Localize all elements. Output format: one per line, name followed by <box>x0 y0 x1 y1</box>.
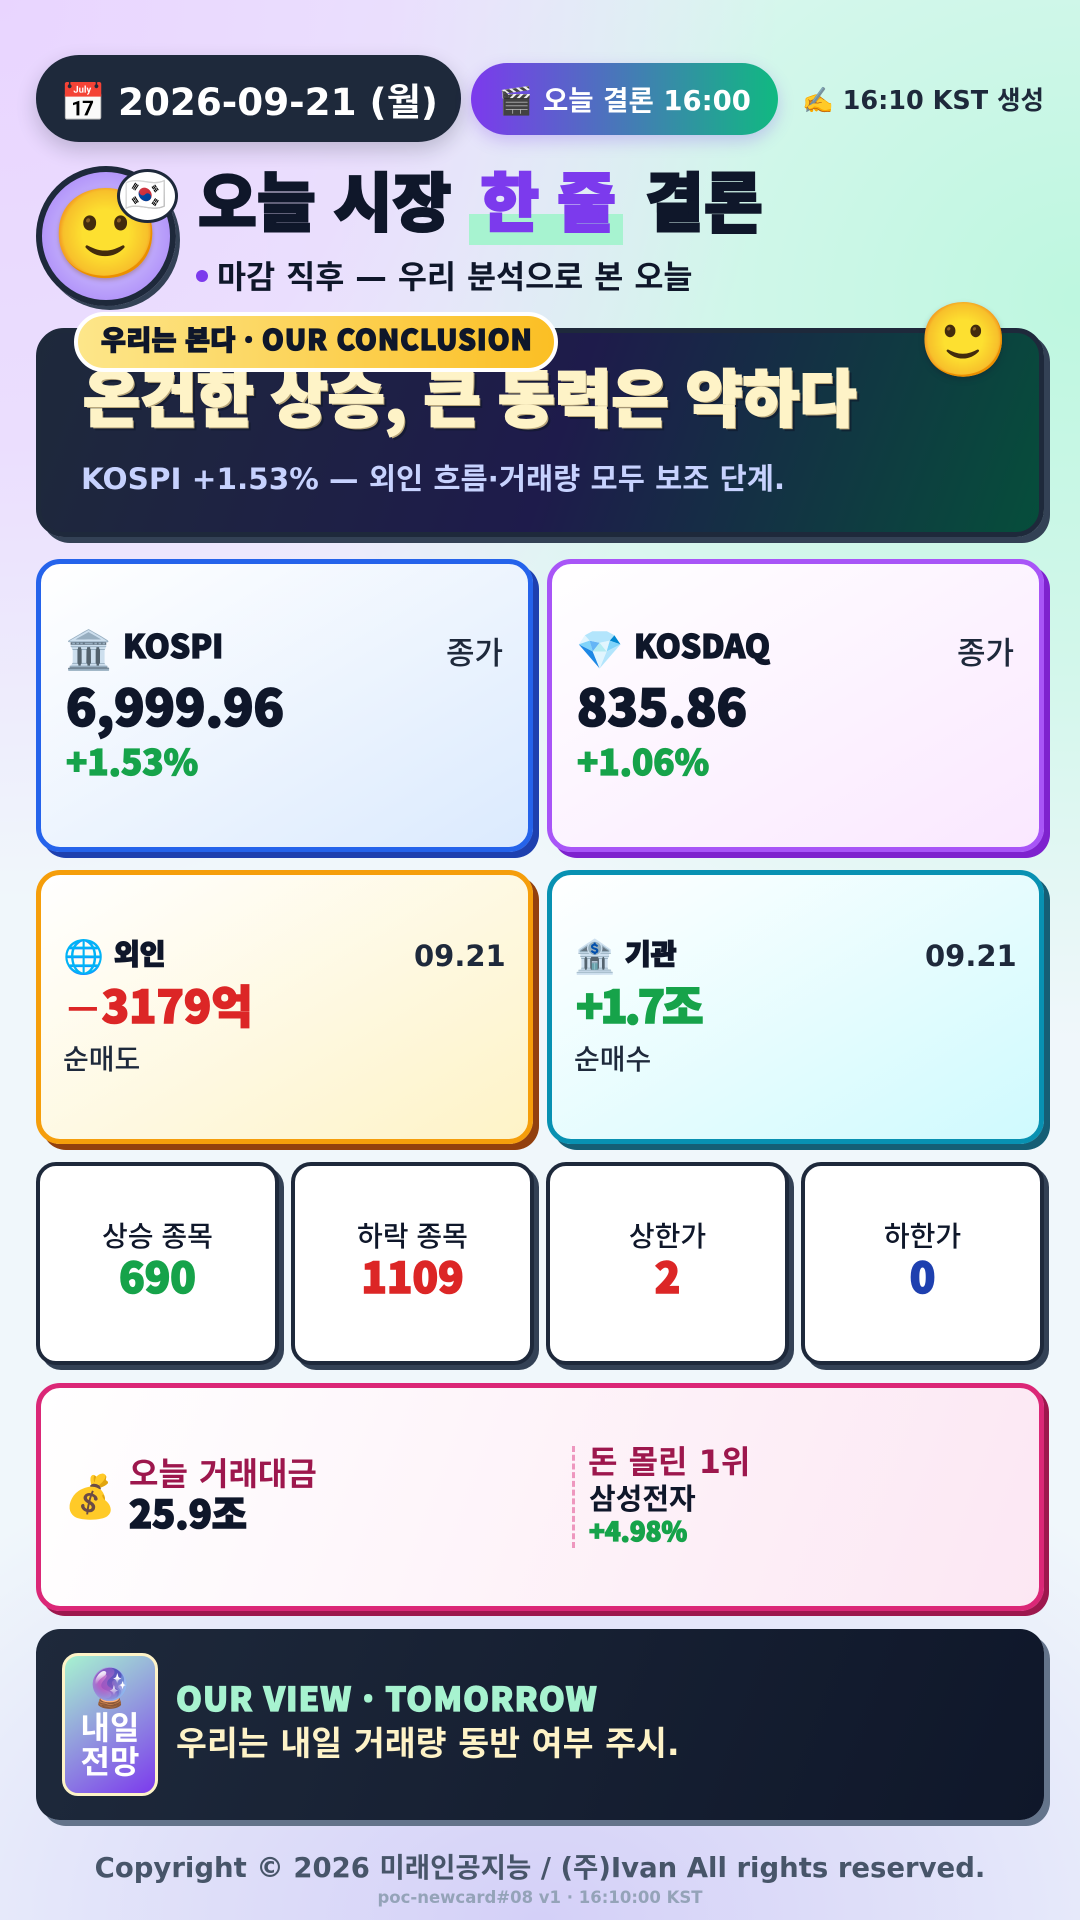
icon: money bag: 💰 <box>64 1472 116 1521</box>
title highlight <box>469 214 623 245</box>
date: 09.21 <box>414 939 506 973</box>
label: 외인 <box>114 933 166 973</box>
badge text: 전망 <box>81 1743 139 1781</box>
label: 상한가 <box>629 1215 706 1255</box>
hero subtext: KOSPI +1.53% — 외인 흐름·거래량 모두 보조 단계. <box>81 462 785 496</box>
badge: korean flag: 🇰🇷 <box>124 175 166 215</box>
change: +1.53% <box>66 735 198 786</box>
label: 오늘 거래대금 <box>129 1455 317 1493</box>
footer copyright: Copyright © 2026 미래인공지능 / (주)Ivan All rights reserved. <box>95 1852 985 1884</box>
view heading: OUR VIEW · TOMORROW <box>176 1673 598 1721</box>
generated time: ✍️ 16:10 KST 생성 <box>802 86 1044 116</box>
icon: smiley: 🙂 <box>51 182 161 285</box>
stat: advancing <box>36 1162 279 1365</box>
top stock change: +4.98% <box>589 1512 687 1549</box>
conclusion tag <box>74 312 558 372</box>
panel: foreign investors <box>36 870 533 1144</box>
panel: KOSDAQ <box>547 559 1044 852</box>
panel: institutions <box>547 870 1044 1144</box>
value: 25.9조 <box>129 1484 247 1539</box>
value: −3179억 <box>64 971 253 1036</box>
avatar <box>36 166 176 306</box>
subtitle text: 마감 직후 — 우리 분석으로 본 오늘 <box>217 260 692 296</box>
view text: 우리는 내일 거래량 동반 여부 주시. <box>176 1724 680 1763</box>
value: 835.86 <box>577 669 747 741</box>
number: 690 <box>119 1245 196 1306</box>
tag: 종가 <box>957 628 1014 673</box>
badge: korean flag <box>117 169 178 223</box>
stat: upper limit <box>546 1162 789 1365</box>
badge text <box>81 1709 139 1781</box>
conclusion time pill <box>471 63 778 135</box>
divider <box>572 1446 575 1548</box>
tomorrow badge <box>62 1653 158 1796</box>
number: 0 <box>910 1245 935 1306</box>
icon: calendar: 📅 <box>60 81 106 124</box>
label: 하한가 <box>884 1215 961 1255</box>
icon: crystal ball: 🔮 <box>86 1666 134 1710</box>
label: 하락 종목 <box>357 1215 468 1255</box>
bullet <box>196 270 208 282</box>
number: 2 <box>655 1245 680 1306</box>
icon: smiley: 🙂 <box>918 298 1009 383</box>
label: 상승 종목 <box>102 1215 213 1255</box>
tag: 종가 <box>446 628 503 673</box>
conclusion time text: 오늘 결론 16:00 <box>543 85 751 117</box>
label: 기관 <box>625 933 677 973</box>
label: KOSDAQ <box>634 622 770 668</box>
headline: 온건한 상승, 큰 동력은 약하다 <box>83 349 856 439</box>
stat: lower limit <box>801 1162 1044 1365</box>
stat: declining <box>291 1162 534 1365</box>
panel: tomorrow view <box>36 1629 1044 1820</box>
title: 한 줄 <box>480 153 616 245</box>
footer version: poc-newcard#08 v1 · 16:10:00 KST <box>377 1888 703 1907</box>
icon: clapper board: 🎬 <box>499 86 533 117</box>
badge text: 내일 <box>81 1709 139 1747</box>
icon: gem: 💎 <box>576 628 623 672</box>
number: 1109 <box>361 1245 464 1306</box>
conclusion tag: 우리는 본다 · OUR CONCLUSION <box>101 319 533 359</box>
top stock name: 삼성전자 <box>589 1476 696 1518</box>
label: KOSPI <box>123 622 223 668</box>
value: +1.7조 <box>576 971 701 1036</box>
title: 오늘 시장 결론 <box>198 153 763 245</box>
date pill <box>36 55 461 142</box>
panel: hero conclusion <box>36 328 1044 537</box>
subtitle <box>196 260 692 296</box>
note: 순매도 <box>63 1038 140 1078</box>
value: 6,999.96 <box>66 669 284 741</box>
icon: classical building: 🏛️ <box>65 628 112 672</box>
top stock heading: 돈 몰린 1위 <box>588 1443 750 1481</box>
icon: bank: 🏦 <box>574 937 615 976</box>
change: +1.06% <box>577 735 709 786</box>
icon: globe: 🌐 <box>63 937 104 976</box>
note: 순매수 <box>574 1038 651 1078</box>
panel: trading value <box>36 1383 1044 1611</box>
panel: KOSPI <box>36 559 533 852</box>
date: 09.21 <box>925 939 1017 973</box>
date text: 2026-09-21 (월) <box>118 80 438 124</box>
